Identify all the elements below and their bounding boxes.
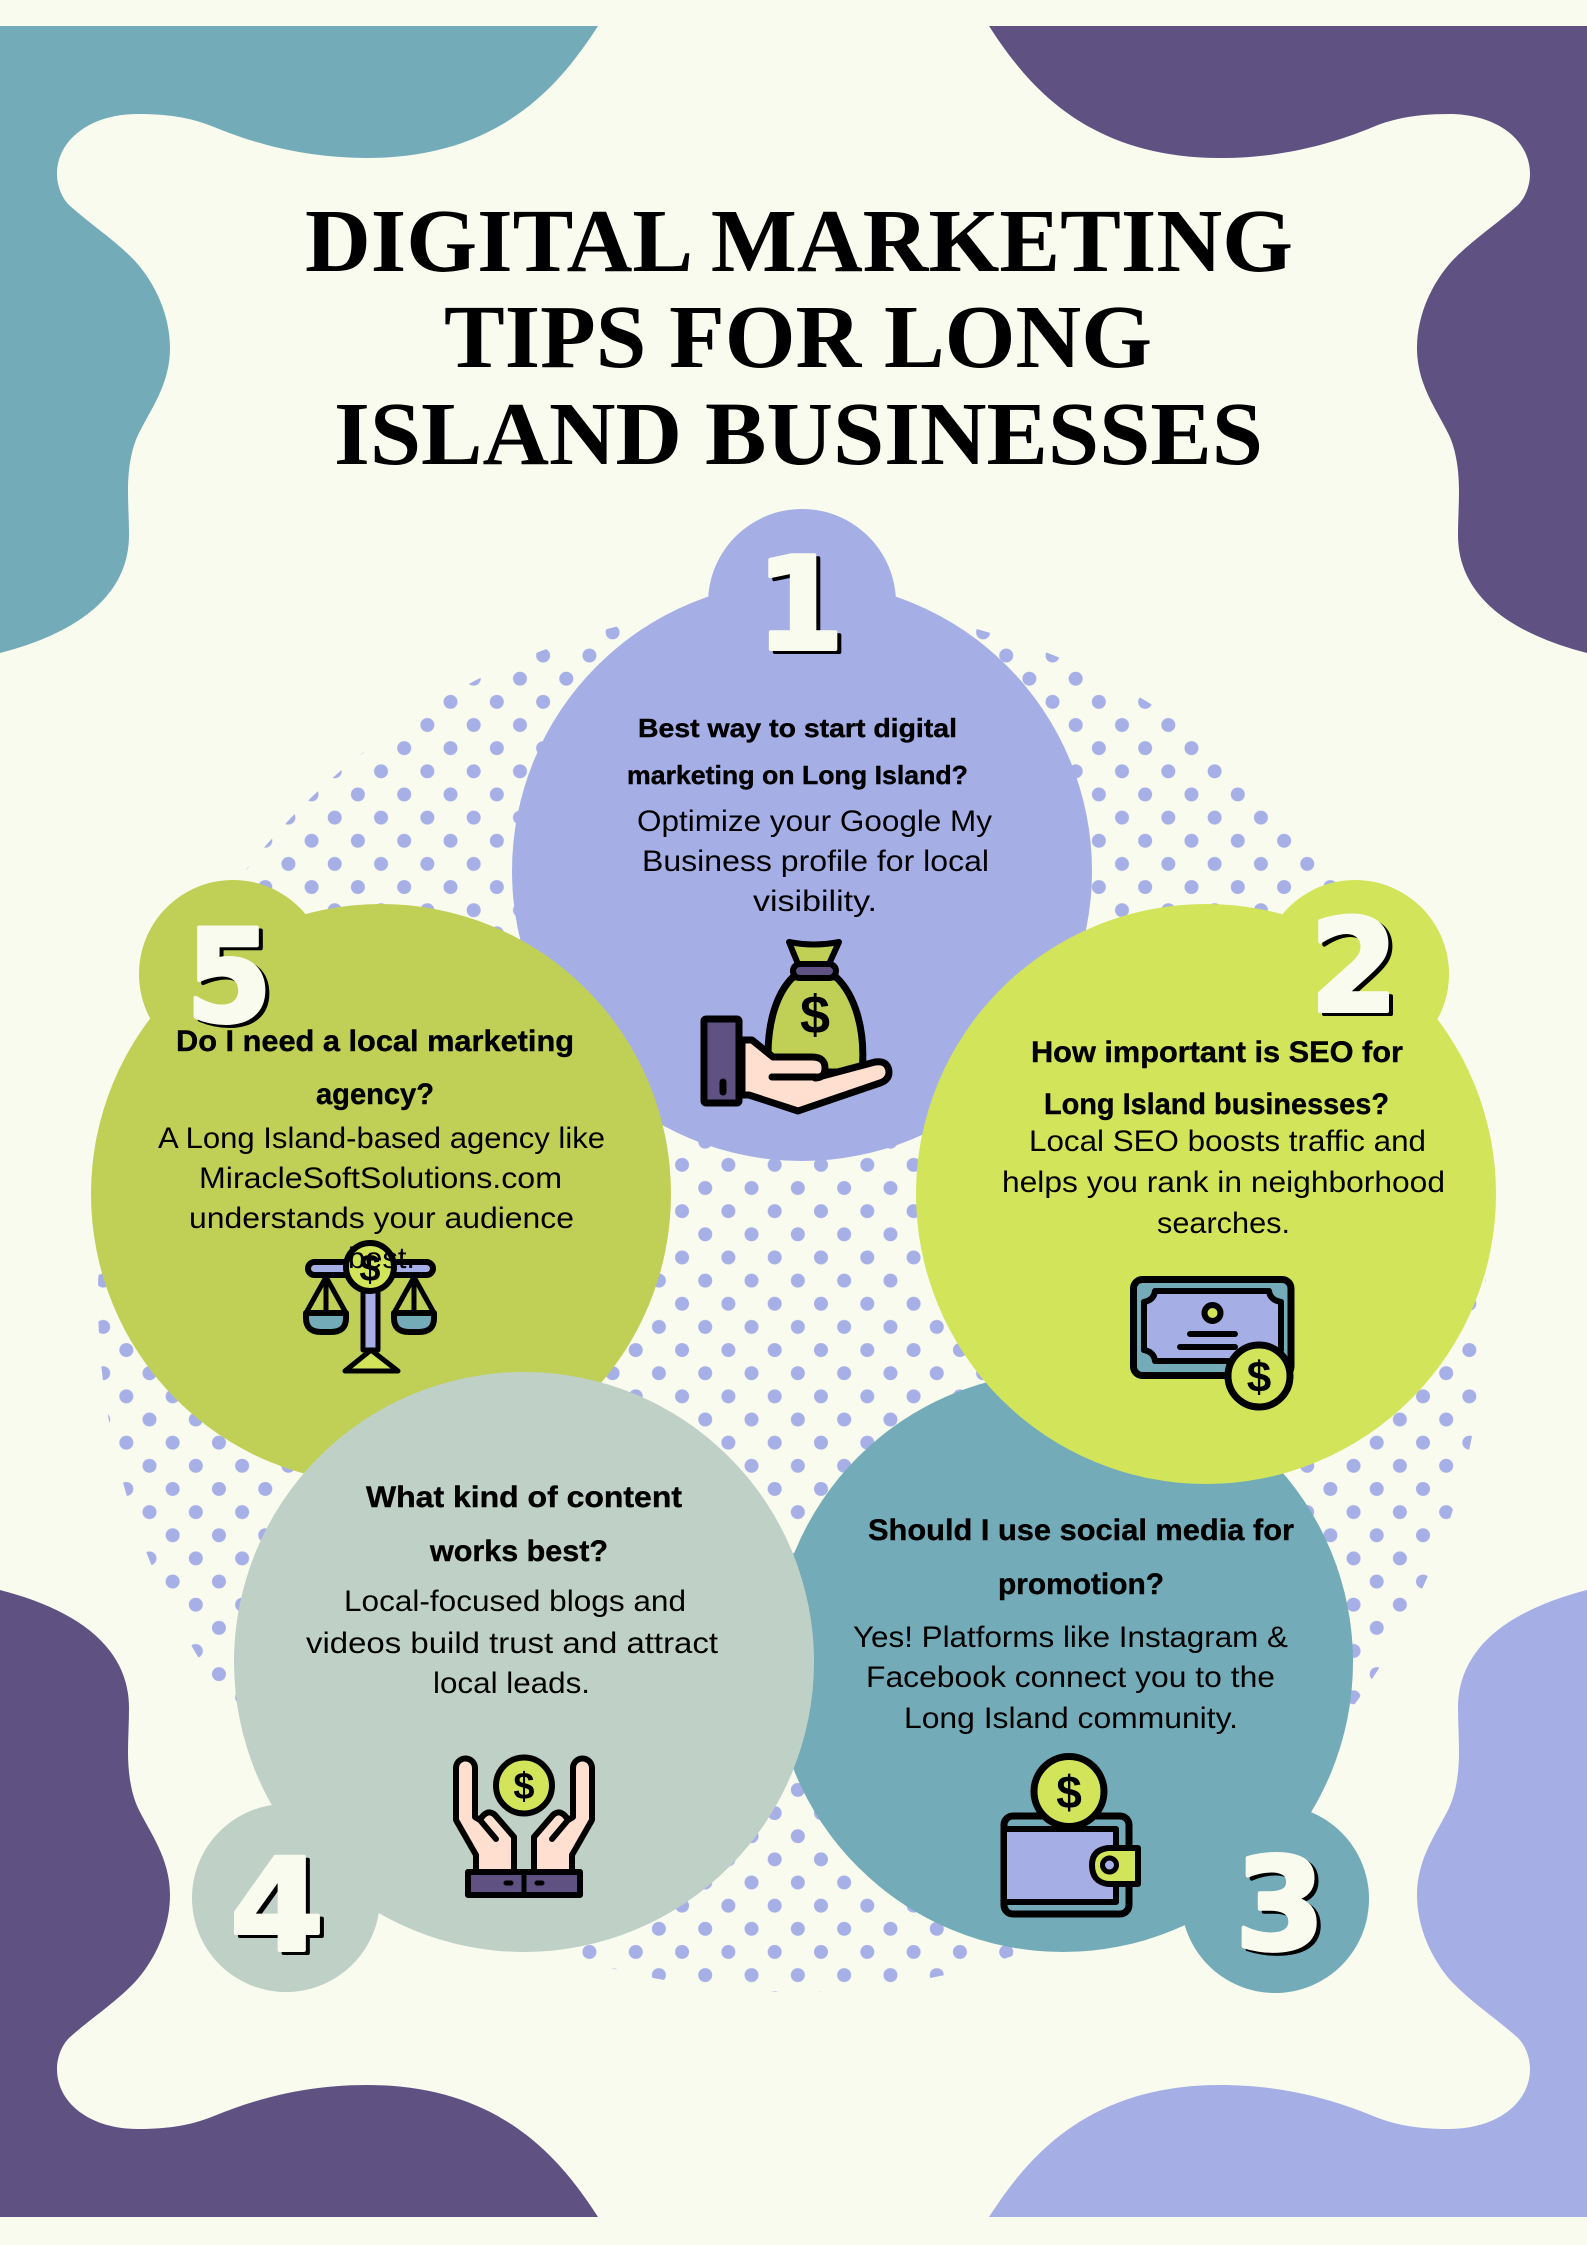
question 3: Should I use social media for (868, 1514, 1294, 1547)
number 5: 5 (186, 903, 272, 1052)
panel: tip 1 (512, 509, 1092, 1161)
answer 2: Local SEO boosts traffic and (1029, 1125, 1426, 1158)
answer 5: understands your audience (189, 1202, 574, 1235)
answer 4: Local-focused blogs and (344, 1585, 686, 1618)
answer 1 (637, 805, 992, 918)
answer 3: Yes! Platforms like Instagram & (853, 1621, 1288, 1654)
question 3: promotion? (998, 1568, 1164, 1601)
answer 1: Business profile for local (642, 845, 989, 878)
panel: tip 4 (192, 1372, 814, 1992)
corner shape: bottom left purple (0, 1590, 598, 2217)
panel: tip 5 (91, 880, 671, 1484)
question 1: marketing on Long Island? (627, 760, 968, 790)
answer 4 (306, 1585, 719, 1700)
answer 4: videos build trust and attract (306, 1627, 719, 1660)
question 2 (1031, 1036, 1403, 1121)
question 4: What kind of content (366, 1481, 682, 1514)
question 4 (366, 1481, 682, 1568)
icon: hands holding coin: $ (513, 1766, 535, 1808)
question 1 (627, 713, 968, 790)
icon: banknote with coin: $ (1247, 1353, 1271, 1402)
corner shape: top left teal (0, 26, 598, 653)
question 2: How important is SEO for (1031, 1036, 1403, 1069)
icon: money bag in hand: $ (800, 985, 830, 1045)
dotted circle background pattern (98, 604, 1486, 1992)
icon: hands holding coin (456, 1758, 592, 1895)
question 2: Long Island businesses? (1044, 1088, 1389, 1121)
answer 5: MiracleSoftSolutions.com (199, 1162, 562, 1195)
icon: balance scale: $ (359, 1248, 381, 1290)
answer 2: searches. (1157, 1207, 1290, 1240)
corner shape: top right purple (989, 26, 1587, 653)
question 1: Best way to start digital (638, 713, 957, 743)
icon: wallet with coin: $ (1056, 1766, 1082, 1818)
question 3 (868, 1514, 1294, 1601)
answer 2: helps you rank in neighborhood (1002, 1166, 1445, 1199)
answer 3: Facebook connect you to the (866, 1661, 1275, 1694)
answer 5 (158, 1122, 605, 1275)
answer 5: best. (348, 1242, 415, 1275)
corner shape: bottom right periwinkle (989, 1590, 1587, 2217)
answer 3: Long Island community. (904, 1702, 1238, 1735)
question 4: works best? (429, 1535, 608, 1568)
answer 5: A Long Island-based agency like (158, 1122, 605, 1155)
question 5: agency? (316, 1078, 434, 1111)
answer 1: visibility. (753, 885, 877, 918)
panel: tip 2 (916, 880, 1496, 1484)
icon: banknote with coin (1134, 1280, 1291, 1407)
answer 2 (1002, 1125, 1445, 1240)
question 5 (176, 1025, 574, 1111)
answer 4: local leads. (433, 1667, 590, 1700)
question 5: Do I need a local marketing (176, 1025, 574, 1058)
number 3: 3 (1235, 1831, 1325, 1980)
number 1: 1 (756, 531, 844, 680)
title: ISLAND BUSINESSES (334, 385, 1263, 484)
number 2: 2 (1310, 893, 1398, 1042)
icon: wallet with coin (1004, 1756, 1138, 1914)
number 4: 4 (230, 1832, 324, 1981)
title: TIPS FOR LONG (444, 288, 1152, 387)
answer 3 (853, 1621, 1288, 1735)
title: DIGITAL MARKETING (305, 192, 1293, 291)
icon: money bag in hand (704, 942, 889, 1111)
icon: balance scale (306, 1243, 434, 1371)
panel: tip 3 (773, 1372, 1369, 1993)
title (305, 192, 1293, 484)
answer 1: Optimize your Google My (637, 805, 992, 838)
